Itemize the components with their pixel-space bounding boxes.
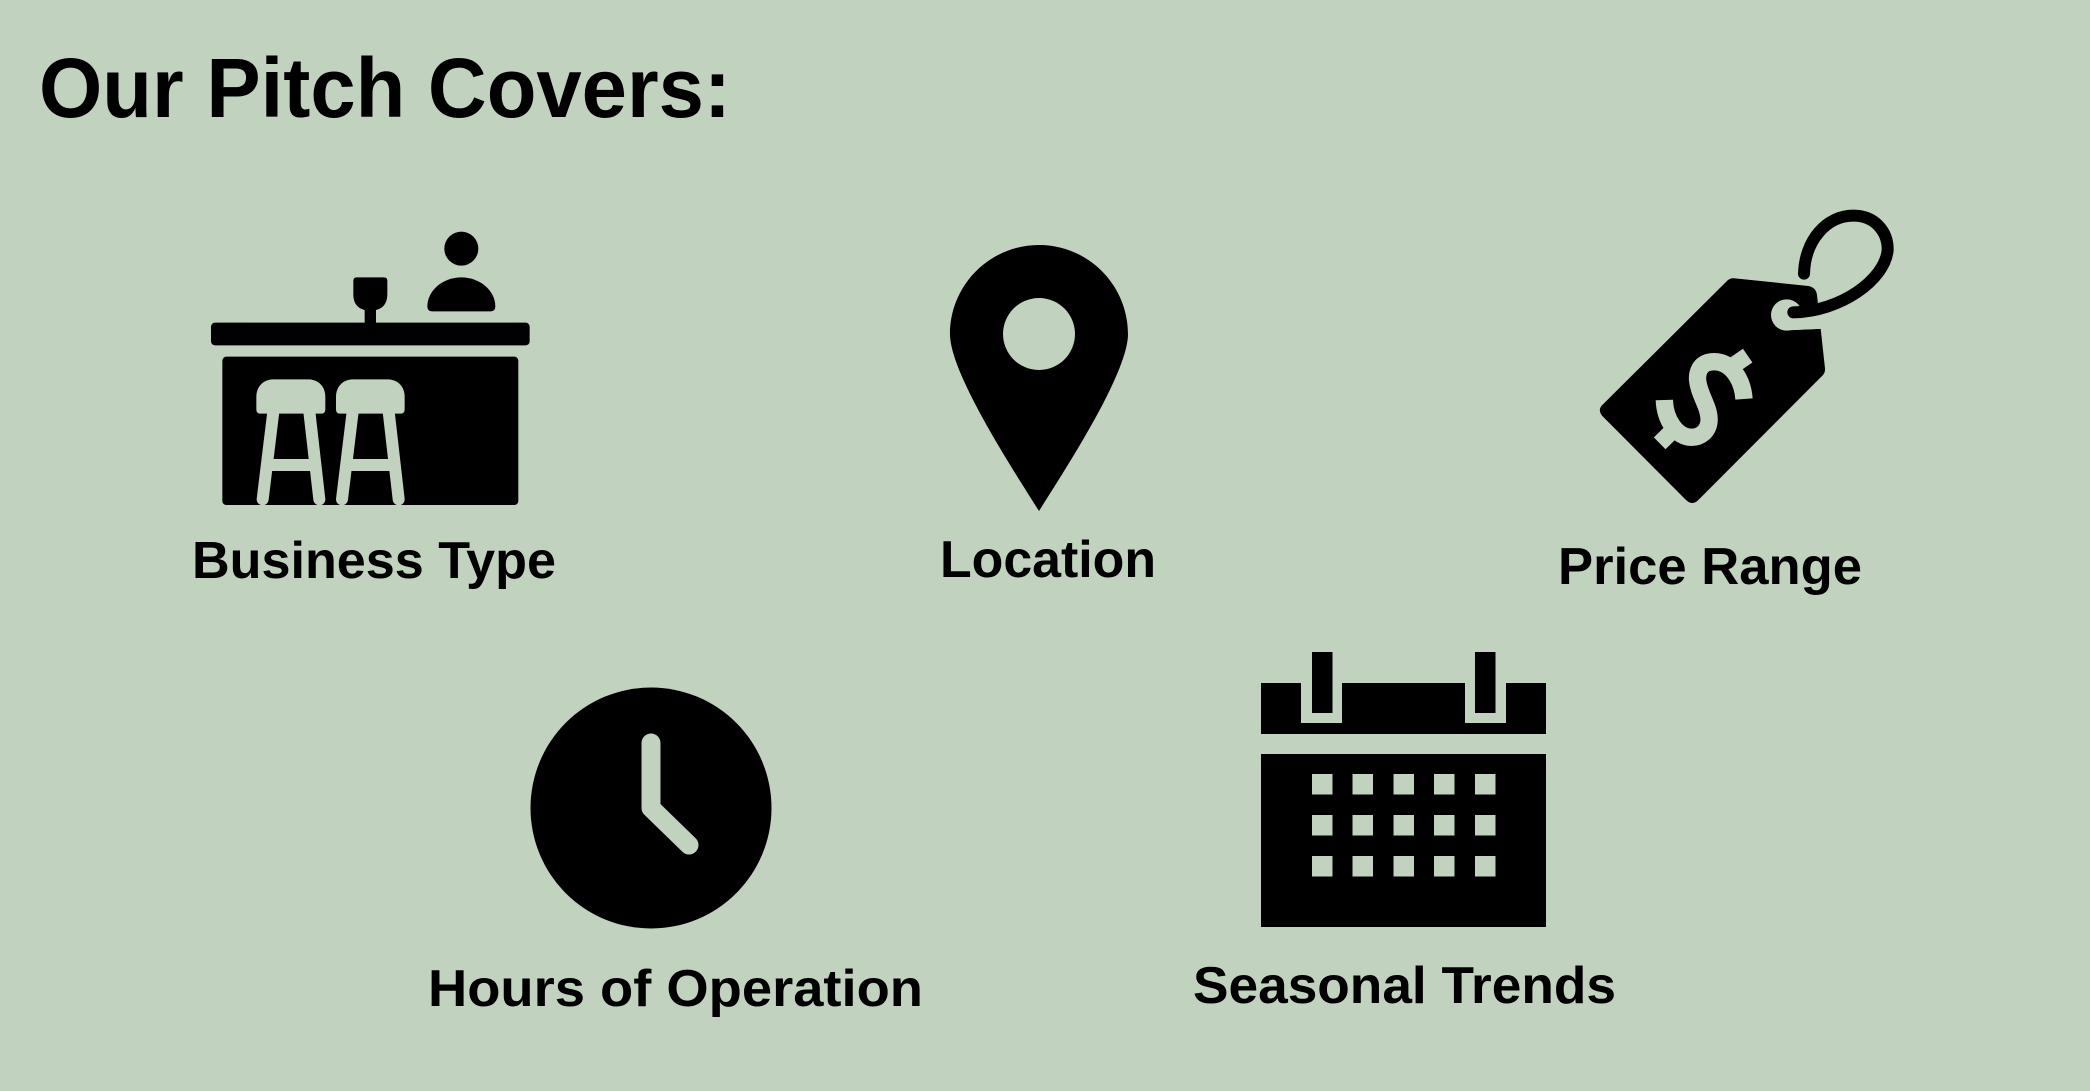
- icon: bar counter with stools and bartender: [211, 232, 530, 505]
- title: Our Pitch Covers:: [39, 41, 731, 135]
- label: price range: Price Range: [1558, 538, 1862, 596]
- icon: clock: [530, 688, 772, 928]
- icon: price tag: [1600, 216, 1888, 503]
- icon: location pin: [950, 245, 1128, 511]
- label: location: Location: [940, 531, 1156, 589]
- label: business type: Business Type: [192, 532, 556, 590]
- icon: calendar: [1261, 652, 1546, 927]
- label: seasonal trends: Seasonal Trends: [1193, 957, 1616, 1015]
- label: hours of operation: Hours of Operation: [428, 960, 923, 1018]
